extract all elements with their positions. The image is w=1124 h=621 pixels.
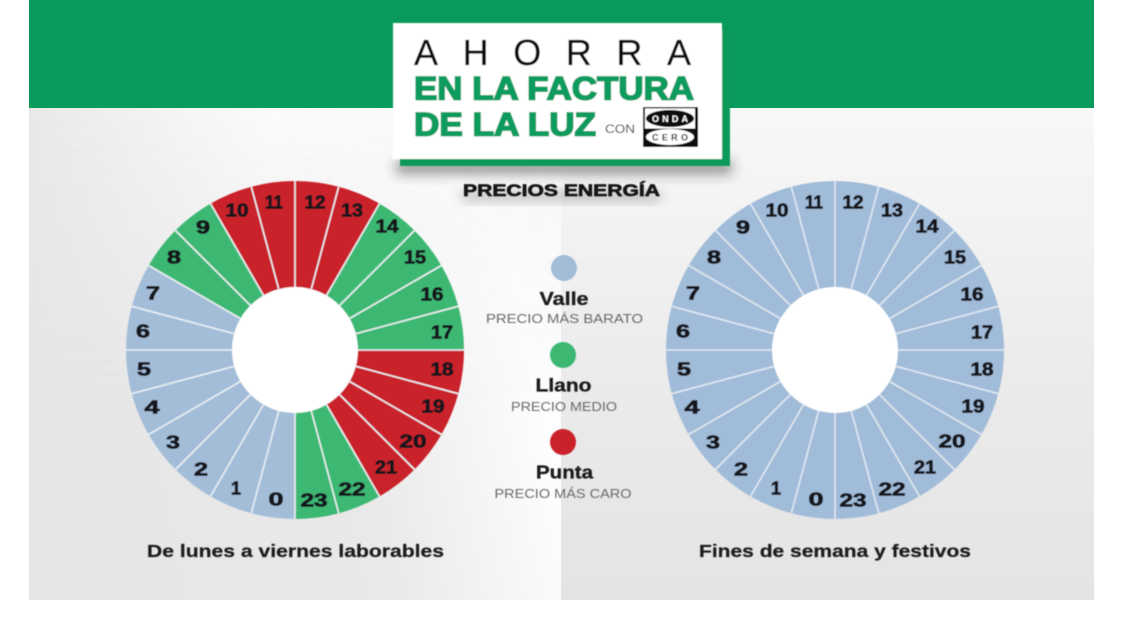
hour labels: 14	[916, 216, 938, 236]
legend: punta: PRECIO MÁS CARO	[494, 486, 632, 501]
hour labels: 17	[431, 322, 453, 342]
hour labels: 20	[400, 432, 426, 452]
hour labels: 15	[944, 248, 966, 268]
icon: onda cero logo: CERO	[652, 132, 688, 142]
hour labels: 4	[684, 398, 700, 418]
hour labels: 3	[166, 432, 180, 452]
hour labels: 8	[707, 248, 721, 268]
hour labels: 18	[430, 360, 454, 380]
caption: weekdays: De lunes a viernes laborables	[147, 541, 444, 561]
chart: weekend wheel	[666, 181, 1004, 519]
sectors: valle all day	[666, 181, 1004, 519]
hour labels: 13	[341, 200, 363, 220]
icon: onda cero logo	[643, 107, 698, 147]
icon: onda cero logo: ONDA	[652, 114, 688, 124]
hour labels: 12	[304, 192, 326, 212]
hour labels	[676, 192, 994, 510]
hour labels: 9	[736, 218, 750, 238]
hour labels: 14	[376, 216, 398, 236]
sectors: valle	[126, 266, 295, 519]
hour labels: 6	[136, 322, 150, 342]
hour labels	[136, 192, 454, 510]
hour labels: 7	[146, 284, 160, 304]
hour labels: 6	[676, 322, 690, 342]
title: con: CON	[605, 124, 635, 136]
hour labels: 20	[938, 432, 966, 452]
hour labels: 13	[881, 200, 903, 220]
title: ahorra: AHORRA	[414, 32, 691, 73]
hour labels: 1	[771, 478, 781, 498]
hour labels: 9	[196, 218, 210, 238]
legend: punta	[494, 429, 632, 501]
hour labels: 19	[422, 396, 444, 416]
hour labels: 15	[404, 248, 426, 268]
title: en la factura: EN LA FACTURA	[414, 70, 694, 106]
hour labels: 4	[144, 398, 160, 418]
center hole	[772, 287, 898, 413]
hour labels: 3	[706, 432, 720, 452]
legend: valle	[486, 255, 643, 326]
sectors: llano morning	[149, 204, 295, 350]
hour labels: 2	[194, 460, 208, 480]
hour labels: 17	[971, 322, 993, 342]
hour labels: 1	[231, 478, 241, 498]
hour labels: 0	[808, 490, 824, 510]
hour labels: 10	[226, 200, 248, 220]
panel: background	[29, 108, 1094, 600]
title: de la luz: DE LA LUZ	[414, 106, 596, 142]
legend: llano	[511, 342, 617, 414]
hour labels: 5	[677, 360, 691, 380]
legend: valle: Valle	[540, 289, 588, 309]
legend	[486, 255, 643, 501]
hour labels: 7	[686, 284, 700, 304]
legend: valle: PRECIO MÁS BARATO	[486, 311, 643, 326]
caption: weekends: Fines de semana y festivos	[699, 541, 971, 561]
legend: punta: Punta	[536, 462, 594, 482]
hour labels: 8	[167, 248, 181, 268]
hour labels: 22	[338, 480, 366, 500]
legend: llano: PRECIO MEDIO	[511, 400, 617, 414]
hour labels: 18	[970, 360, 994, 380]
hour labels: 0	[268, 490, 284, 510]
hour labels: 23	[300, 490, 328, 510]
hour labels: 22	[878, 480, 906, 500]
hour labels: 11	[265, 192, 283, 212]
sectors: llano night	[295, 350, 380, 519]
hour labels: 11	[805, 192, 823, 212]
heading: precios energia: PRECIOS ENERGÍA	[463, 181, 660, 200]
hour labels: 12	[842, 192, 864, 212]
title card	[393, 23, 732, 174]
sectors: llano afternoon	[295, 204, 464, 350]
header band	[29, 0, 1094, 108]
hour labels: 21	[914, 458, 936, 478]
hour labels: 16	[420, 284, 444, 304]
legend: llano: Llano	[536, 376, 592, 396]
hour labels: 23	[840, 490, 866, 510]
hour labels: 10	[766, 200, 788, 220]
hour labels: 2	[734, 460, 748, 480]
hour labels: 21	[375, 458, 397, 478]
hour labels: 5	[137, 360, 151, 380]
hour labels: 19	[962, 396, 984, 416]
hour labels: 16	[960, 284, 984, 304]
chart: weekday wheel	[126, 181, 464, 519]
center hole	[232, 287, 358, 413]
sectors: punta evening	[295, 350, 464, 496]
sectors: punta midday	[210, 181, 380, 350]
